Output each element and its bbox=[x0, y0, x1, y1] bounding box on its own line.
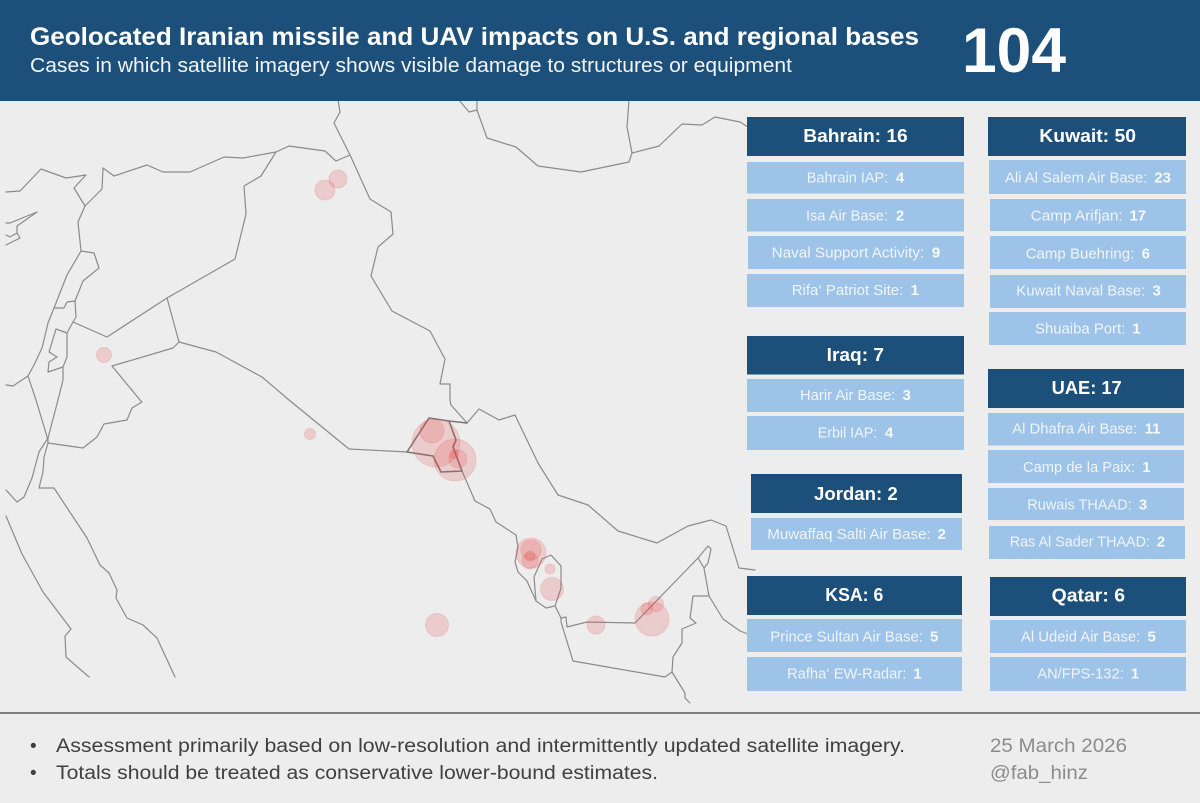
row: Harir Air Base: Harir Air Base: bbox=[800, 387, 895, 404]
heading: Iraq bbox=[747, 336, 964, 374]
map of borders and impacts bbox=[6, 100, 755, 703]
row: Isa Air Base bbox=[747, 199, 964, 232]
row: Al Dhafra Air Base bbox=[988, 413, 1184, 446]
impact: Muwaffaq Salti bbox=[96, 348, 112, 362]
footer notes bbox=[30, 736, 905, 784]
panel: Bahrain bbox=[747, 117, 964, 307]
panel: Jordan bbox=[751, 474, 962, 550]
heading: Qatar: Qatar: 6 bbox=[1052, 586, 1125, 606]
impacts: Qatar bbox=[540, 564, 564, 600]
row: Naval Support Activity: 9 bbox=[932, 245, 940, 262]
country borders bbox=[6, 100, 755, 703]
heading: UAE bbox=[988, 369, 1184, 408]
row: Camp Arifjan: 17 bbox=[1129, 207, 1146, 224]
impacts: UAE east bbox=[635, 596, 669, 636]
row: Al Dhafra Air Base: 11 bbox=[1145, 421, 1161, 438]
row: Kuwait Naval Base bbox=[990, 275, 1186, 308]
date and author bbox=[990, 736, 1127, 784]
row: Ras Al Sader THAAD: 2 bbox=[1157, 534, 1165, 551]
impact: Ruwais bbox=[587, 616, 605, 634]
row: Prince Sultan Air Base: 5 bbox=[930, 628, 938, 645]
row: Isa Air Base: Isa Air Base: bbox=[806, 207, 888, 224]
row: Al Dhafra Air Base: Al Dhafra Air Base: bbox=[1012, 421, 1137, 438]
heading: UAE: UAE: 17 bbox=[1052, 378, 1122, 398]
footer notes: • bbox=[30, 763, 37, 784]
row: Naval Support Activity bbox=[748, 236, 964, 269]
impact: Rafha bbox=[304, 428, 316, 440]
heading: Bahrain: Bahrain: 16 bbox=[803, 126, 908, 146]
row: Isa Air Base: 2 bbox=[896, 207, 904, 224]
subtitle: Cases in which satellite imagery shows visible damage to structures or equipment bbox=[30, 55, 792, 77]
row: Erbil IAP bbox=[747, 416, 964, 450]
title: Geolocated Iranian missile and UAV impacts on U.S. and regional bases bbox=[30, 23, 919, 51]
row: Ruwais THAAD: 3 bbox=[1139, 496, 1147, 513]
row: Camp Arifjan bbox=[990, 199, 1186, 231]
row: Muwaffaq Salti Air Base: Muwaffaq Salti Air Base: bbox=[767, 526, 931, 543]
row: Al Udeid Air Base bbox=[990, 620, 1186, 653]
row: Bahrain IAP bbox=[747, 162, 964, 194]
footer bbox=[0, 712, 1200, 784]
impacts: Bahrain bbox=[516, 538, 546, 569]
row: Ali Al Salem Air Base: Ali Al Salem Air Base: bbox=[1005, 170, 1147, 187]
row: Shuaiba Port bbox=[989, 312, 1186, 345]
row: Ruwais THAAD bbox=[988, 488, 1184, 520]
row: Camp de la Paix bbox=[988, 450, 1184, 483]
title banner bbox=[0, 0, 1200, 101]
impact: Prince Sultan bbox=[426, 614, 448, 636]
impact circles bbox=[96, 170, 669, 636]
row: Rifa' Patriot Site bbox=[747, 274, 964, 307]
row: Ruwais THAAD: Ruwais THAAD: bbox=[1027, 496, 1132, 513]
footer notes: Assessment primarily based on low-resolution and intermittently updated satellite imagery. bbox=[56, 736, 905, 757]
heading: Jordan: Jordan: 2 bbox=[814, 484, 898, 504]
heading: Iraq: Iraq: 7 bbox=[827, 345, 884, 365]
row: Rifa' Patriot Site: Rifa‘ Patriot Site: bbox=[792, 282, 903, 299]
heading: Qatar bbox=[990, 577, 1186, 616]
panel: Qatar bbox=[990, 577, 1186, 691]
row: Al Udeid Air Base: 5 bbox=[1148, 628, 1156, 645]
row: Bahrain IAP: 4 bbox=[896, 170, 905, 187]
row: Ali Al Salem Air Base: 23 bbox=[1154, 170, 1171, 187]
date and author: 25 March 2026 bbox=[990, 736, 1127, 757]
row: Harir Air Base bbox=[747, 379, 964, 412]
heading: KSA bbox=[747, 576, 962, 615]
row: Ras Al Sader THAAD: Ras Al Sader THAAD: bbox=[1010, 534, 1150, 551]
row: Harir Air Base: 3 bbox=[903, 387, 911, 404]
footer notes: • bbox=[30, 736, 37, 757]
heading: Bahrain bbox=[747, 117, 964, 156]
Kuwait border bbox=[407, 418, 467, 472]
panel: Iraq bbox=[747, 336, 964, 450]
panel: UAE bbox=[988, 369, 1185, 559]
total count: 104 bbox=[962, 16, 1066, 86]
row: Kuwait Naval Base: 3 bbox=[1153, 283, 1161, 300]
heading: KSA: KSA: 6 bbox=[825, 585, 883, 605]
heading: Kuwait bbox=[988, 117, 1186, 156]
row: Bahrain IAP: Bahrain IAP: bbox=[807, 170, 888, 187]
row: Shuaiba Port: Shuaiba Port: bbox=[1035, 320, 1125, 337]
row: Ras Al Sader THAAD bbox=[989, 526, 1185, 559]
row: Muwaffaq Salti Air Base bbox=[751, 518, 962, 550]
row: Camp Buehring: 6 bbox=[1142, 245, 1150, 262]
row: AN/FPS-132: 1 bbox=[1131, 666, 1139, 683]
row: Rafha' EW-Radar: 1 bbox=[913, 666, 922, 683]
heading: Jordan bbox=[751, 474, 962, 513]
row: Rafha' EW-Radar: Rafha‘ EW-Radar: bbox=[787, 666, 906, 683]
row: AN/FPS-132: AN/FPS-132: bbox=[1037, 666, 1124, 683]
heading: Kuwait: Kuwait: 50 bbox=[1039, 126, 1136, 146]
row: Prince Sultan Air Base bbox=[747, 619, 962, 652]
panel: Kuwait bbox=[988, 117, 1186, 345]
row: Camp Buehring bbox=[990, 236, 1186, 269]
row: Rafha' EW-Radar bbox=[747, 657, 962, 691]
row: Camp Arifjan: Camp Arifjan: bbox=[1031, 207, 1123, 224]
footer notes: Totals should be treated as conservative lower-bound estimates. bbox=[56, 763, 658, 784]
row: Camp Buehring: Camp Buehring: bbox=[1026, 245, 1134, 262]
impacts: Erbil and Harir bbox=[315, 170, 347, 200]
row: Naval Support Activity: Naval Support Activity: bbox=[772, 245, 924, 262]
row: Ali Al Salem Air Base bbox=[989, 160, 1186, 194]
row: AN/FPS-132 bbox=[990, 657, 1186, 691]
date and author: @fab_hinz bbox=[990, 763, 1088, 784]
impacts: Kuwait bbox=[412, 419, 476, 481]
row: Al Udeid Air Base: Al Udeid Air Base: bbox=[1021, 628, 1140, 645]
row: Muwaffaq Salti Air Base: 2 bbox=[938, 526, 946, 543]
row: Camp de la Paix: Camp de la Paix: bbox=[1023, 459, 1135, 476]
row: Shuaiba Port: 1 bbox=[1132, 320, 1141, 337]
row: Camp de la Paix: 1 bbox=[1142, 459, 1151, 476]
row: Prince Sultan Air Base: Prince Sultan Air Base: bbox=[770, 628, 923, 645]
panel: KSA bbox=[747, 576, 962, 691]
row: Rifa' Patriot Site: 1 bbox=[911, 282, 919, 299]
row: Erbil IAP: Erbil IAP: bbox=[818, 425, 877, 442]
row: Kuwait Naval Base: Kuwait Naval Base: bbox=[1016, 283, 1145, 300]
row: Erbil IAP: 4 bbox=[885, 425, 894, 442]
